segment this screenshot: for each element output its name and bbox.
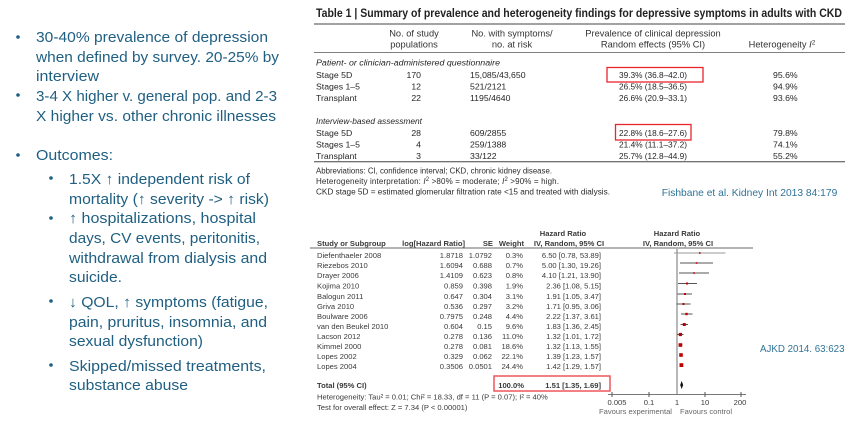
forest x axis: Favours experimental bbox=[599, 407, 672, 416]
sub-bullet: hospitalizations: withdrawal from dialysis and bbox=[68, 250, 267, 267]
table section: questionnaire: 26.6% (20.9–33.1) bbox=[619, 93, 687, 103]
forest study rows: Riezebos 2010 bbox=[317, 261, 368, 270]
table section: interview: 74.1% bbox=[773, 140, 798, 150]
forest study rows: Kojima 2010 bbox=[317, 282, 359, 290]
forest study rows: 0.15 bbox=[477, 322, 492, 331]
forest study rows: 0.3506 bbox=[440, 362, 463, 371]
forest study rows: 4.10 [1.21, 13.90] bbox=[542, 271, 601, 280]
table footnotes: Abbreviations: CI, confidence interval; CKD, chronic kidney disease. bbox=[316, 166, 552, 175]
forest study rows: 2.36 [1.08, 5.15] bbox=[546, 282, 601, 290]
forest total row: 1.51 [1.35, 1.69] bbox=[545, 381, 601, 390]
sub-bullet: quality of life: ↓ QOL, ↑ symptoms (fatigue, bbox=[69, 294, 268, 311]
forest study rows: 0.248 bbox=[473, 312, 492, 321]
forest study rows: Lopes 2002 bbox=[317, 352, 357, 361]
forest column headers bbox=[317, 229, 713, 248]
forest study rows: 0.859 bbox=[444, 282, 463, 290]
forest study rows: 1.8718 bbox=[440, 251, 463, 260]
forest column headers: IV, Random, 95% CI bbox=[534, 239, 604, 248]
table section: questionnaire: Transplant bbox=[316, 93, 357, 103]
forest study rows: 1.6094 bbox=[440, 261, 463, 270]
callout: interview highlight box bbox=[616, 124, 691, 140]
forest x axis: 1 bbox=[675, 398, 679, 407]
sub-bullet: mortality bbox=[49, 171, 269, 208]
forest study rows: 1.32 [1.01, 1.72] bbox=[546, 332, 601, 341]
panel: prevalence table bbox=[314, 8, 845, 196]
forest study rows: 1.91 [1.05, 3.47] bbox=[546, 292, 601, 301]
table section: questionnaire: 15,085/43,650 bbox=[470, 70, 526, 80]
forest study rows: 18.6% bbox=[501, 342, 523, 351]
table section: interview: 25.7% (12.8–44.9) bbox=[619, 151, 687, 161]
forest study rows: 0.604 bbox=[444, 322, 463, 331]
callout: questionnaire highlight box bbox=[607, 68, 703, 82]
forest column headers: Hazard Ratio bbox=[540, 229, 587, 238]
forest study rows: Lopes 2004 bbox=[317, 362, 357, 371]
forest study rows: 22.1% bbox=[501, 352, 523, 361]
table section: questionnaire: 26.5% (18.5–36.5) bbox=[619, 82, 687, 92]
forest x axis: 10 bbox=[701, 398, 709, 407]
table column headers bbox=[389, 28, 816, 50]
sub-bullet: hospitalizations: days, CV events, peritonitis, bbox=[69, 230, 260, 247]
forest column headers: Study or Subgroup bbox=[317, 239, 386, 248]
forest study rows: 3.1% bbox=[506, 292, 523, 301]
forest summary diamond bbox=[680, 381, 683, 389]
table section: questionnaire: Stage 5D bbox=[316, 70, 352, 80]
table section: interview: 79.8% bbox=[773, 128, 798, 138]
forest confidence intervals bbox=[674, 253, 726, 365]
forest point estimates bbox=[679, 252, 701, 367]
forest study rows: 3.2% bbox=[506, 302, 523, 311]
table column headers: No. of study bbox=[389, 28, 439, 38]
table column headers: Prevalence of clinical depression bbox=[585, 28, 721, 38]
forest total row: Total (95% CI) bbox=[317, 381, 367, 390]
sub-bullet: quality of life: pain, pruritus, insomnia, and bbox=[69, 314, 267, 331]
forest study rows: 0.062 bbox=[473, 352, 492, 361]
table footnotes: >90% = high. bbox=[508, 177, 559, 186]
sub-bullet: mortality: mortality (↑ severity -> ↑ risk) bbox=[69, 191, 269, 208]
chart: forest plot bbox=[599, 249, 746, 416]
sub-bullet: hospitalizations bbox=[49, 210, 267, 286]
forest study rows bbox=[317, 251, 601, 371]
table section: interview: 3 bbox=[416, 151, 421, 161]
forest study rows: 1.42 [1.29, 1.57] bbox=[546, 362, 601, 371]
forest study rows: 5.00 [1.30, 19.26] bbox=[542, 261, 601, 270]
table column headers: No. with symptoms/ bbox=[471, 28, 553, 38]
table column headers: no. at risk bbox=[492, 40, 532, 50]
forest column headers: IV, Random, 95% CI bbox=[643, 239, 713, 248]
forest study rows: 0.688 bbox=[473, 261, 492, 270]
table section: questionnaire: Patient- or clinician-administered questionnaire bbox=[316, 58, 500, 68]
forest study rows: 0.329 bbox=[444, 352, 463, 361]
forest study rows: 1.39 [1.23, 1.57] bbox=[546, 352, 601, 361]
forest study rows: 0.398 bbox=[473, 282, 492, 290]
citation: Fishbane: Fishbane et al. Kidney Int 2013 84:179 bbox=[662, 188, 838, 199]
forest study rows: 0.647 bbox=[444, 292, 463, 301]
table section: interview: 609/2855 bbox=[470, 128, 506, 138]
table column headers: populations bbox=[390, 40, 438, 50]
forest total row: 100.0% bbox=[498, 381, 524, 390]
table section: questionnaire: 39.3% (36.8–42.0) bbox=[619, 70, 687, 80]
table section: interview: 21.4% (11.1–37.2) bbox=[619, 140, 687, 150]
forest study rows: Griva 2010 bbox=[317, 302, 354, 311]
forest study rows: 0.7975 bbox=[440, 312, 463, 321]
forest study rows: 0.136 bbox=[473, 332, 492, 341]
forest study rows: 0.0501 bbox=[469, 362, 492, 371]
forest study rows: 6.50 [0.78, 53.89] bbox=[542, 251, 601, 260]
forest x axis: Favours control bbox=[680, 407, 732, 416]
sub-bullet: hospitalizations: ↑ hospitalizations, hospital bbox=[69, 210, 256, 227]
forest study rows: Drayer 2006 bbox=[317, 271, 359, 280]
table section: questionnaire bbox=[316, 58, 798, 103]
forest study rows: Kimmel 2000 bbox=[317, 342, 361, 351]
forest x axis: 0.005 bbox=[607, 398, 627, 407]
forest study rows: 0.8% bbox=[506, 271, 523, 280]
table section: questionnaire: Stages 1–5 bbox=[316, 82, 360, 92]
table footnotes: I bbox=[502, 177, 505, 186]
forest study rows: 0.278 bbox=[444, 332, 463, 341]
table section: interview: 259/1388 bbox=[470, 140, 506, 150]
bullet: outcomes heading: Outcomes: bbox=[36, 147, 113, 164]
forest heterogeneity notes: Test for overall effect: Z = 7.34 (P < 0.00001) bbox=[317, 403, 468, 412]
forest column headers: log[Hazard Ratio] bbox=[402, 239, 465, 248]
forest study rows: 0.278 bbox=[444, 342, 463, 351]
forest study rows: Boulware 2006 bbox=[317, 312, 368, 321]
forest study rows: 1.71 [0.95, 3.06] bbox=[546, 302, 601, 311]
table section: questionnaire: 12 bbox=[411, 82, 421, 92]
forest heterogeneity notes: Heterogeneity: Tau² = 0.01; Chi² = 18.33, df = 11 (P = 0.07); I² = 40% bbox=[317, 392, 548, 402]
panel: forest plot table bbox=[310, 229, 753, 412]
forest heterogeneity notes bbox=[317, 392, 548, 412]
table section: questionnaire: 1195/4640 bbox=[470, 93, 511, 103]
sub-bullet: quality of life bbox=[49, 294, 268, 350]
forest study rows: Diefenthaeler 2008 bbox=[317, 251, 381, 260]
bullet: prevalence: interview bbox=[36, 68, 99, 85]
forest study rows: 0.304 bbox=[473, 292, 492, 301]
forest study rows: 0.623 bbox=[473, 271, 492, 280]
bullet: prevalence: 30-40% prevalence of depression bbox=[36, 29, 268, 46]
sub-bullet: skipped treatments bbox=[49, 358, 266, 394]
bullet: relative risk: 3-4 X higher v. general pop. and 2-3 bbox=[36, 88, 277, 105]
table section: interview: Stage 5D bbox=[316, 128, 352, 138]
table footnotes: >80% = moderate; bbox=[429, 177, 502, 186]
forest study rows: 11.0% bbox=[502, 332, 523, 341]
table column headers: Random effects (95% CI) bbox=[601, 40, 705, 50]
table section: questionnaire: 94.9% bbox=[773, 82, 798, 92]
forest study rows: 0.081 bbox=[473, 342, 492, 351]
table section: interview: 22.8% (18.6–27.6) bbox=[619, 128, 687, 138]
table section: interview bbox=[316, 116, 798, 161]
table section: interview: Stages 1–5 bbox=[316, 140, 360, 150]
forest study rows: 9.6% bbox=[506, 322, 523, 331]
table section: interview: 33/122 bbox=[470, 151, 497, 161]
forest total row bbox=[317, 381, 601, 390]
forest x axis bbox=[599, 392, 746, 416]
sub-bullet: hospitalizations: suicide. bbox=[69, 269, 122, 286]
table section: questionnaire: 95.6% bbox=[773, 70, 798, 80]
table footnotes: 2 bbox=[504, 177, 508, 183]
forest study rows: 1.9% bbox=[506, 282, 523, 290]
bullet: prevalence bbox=[16, 29, 280, 85]
forest study rows: 4.4% bbox=[506, 312, 523, 321]
forest column headers: Hazard Ratio bbox=[654, 229, 701, 238]
forest study rows: 1.83 [1.36, 2.45] bbox=[546, 322, 601, 331]
forest study rows: 1.4109 bbox=[440, 271, 463, 280]
forest study rows: 0.536 bbox=[444, 302, 463, 311]
bullet: relative risk: X higher vs. other chronic illnesses bbox=[36, 108, 276, 125]
table section: interview: 4 bbox=[416, 140, 421, 150]
forest study rows: 0.3% bbox=[506, 251, 523, 260]
callout: total highlight box bbox=[494, 376, 610, 391]
sub-bullet: skipped treatments: Skipped/missed treatments, bbox=[69, 358, 266, 375]
bullet: prevalence: when defined by survey. 20-25% by bbox=[35, 49, 280, 66]
forest column headers: SE bbox=[483, 239, 493, 248]
forest study rows: 1.0792 bbox=[469, 251, 492, 260]
sub-bullet: quality of life: sexual dysfunction) bbox=[69, 333, 203, 350]
sub-bullet: skipped treatments: substance abuse bbox=[69, 377, 188, 394]
forest study rows: 1.32 [1.13, 1.55] bbox=[546, 342, 601, 351]
table section: interview: Interview-based assessment bbox=[316, 116, 423, 126]
table section: questionnaire: 170 bbox=[406, 70, 421, 80]
panel: key points text bbox=[16, 29, 280, 394]
table column headers: Heterogeneity I bbox=[749, 40, 812, 50]
bullet: relative risk bbox=[16, 88, 277, 125]
forest study rows: 0.7% bbox=[506, 261, 523, 270]
table column headers: 2 bbox=[812, 40, 816, 46]
forest study rows: 24.4% bbox=[501, 362, 523, 371]
table footnotes bbox=[316, 166, 610, 196]
table section: questionnaire: 521/2121 bbox=[470, 82, 506, 92]
table section: questionnaire: 93.6% bbox=[773, 93, 798, 103]
table footnotes: Heterogeneity interpretation: I bbox=[316, 177, 426, 186]
table section: questionnaire: 22 bbox=[411, 93, 421, 103]
forest study rows: 0.297 bbox=[473, 302, 492, 311]
table footnotes: 2 bbox=[426, 177, 430, 183]
forest x axis: 0.1 bbox=[644, 398, 654, 407]
forest x axis: 200 bbox=[734, 398, 746, 407]
forest study rows: van den Beukel 2010 bbox=[317, 322, 388, 331]
forest column headers: Weight bbox=[499, 239, 524, 248]
table section: interview: Transplant bbox=[316, 151, 357, 161]
forest study rows: Lacson 2012 bbox=[317, 332, 360, 341]
table section: interview: 55.2% bbox=[773, 151, 798, 161]
forest study rows: 2.22 [1.37, 3.61] bbox=[546, 312, 601, 321]
table section: interview: 28 bbox=[411, 128, 421, 138]
sub-bullet: mortality: 1.5X ↑ independent risk of bbox=[69, 171, 251, 188]
table footnotes: CKD stage 5D = estimated glomerular filtration rate <15 and treated with dialysis. bbox=[316, 188, 610, 196]
forest study rows: Balogun 2011 bbox=[317, 292, 363, 301]
